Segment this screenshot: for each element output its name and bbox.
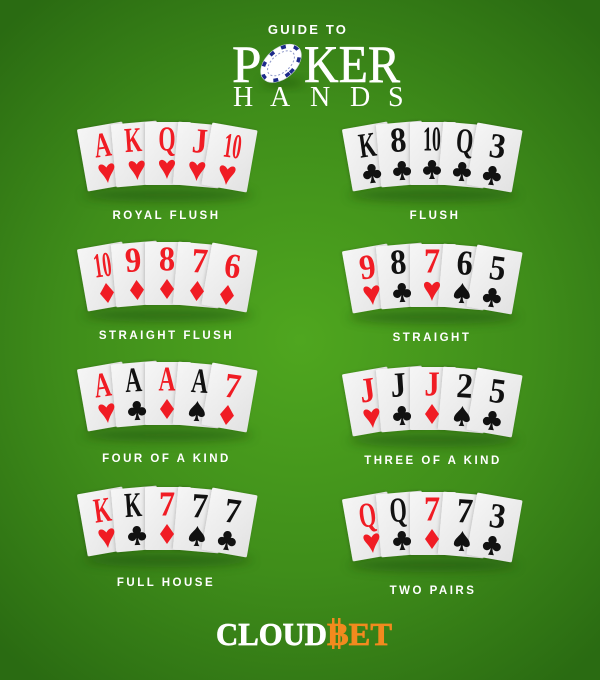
hand: flush bbox=[342, 120, 523, 202]
hand: straight flush bbox=[77, 240, 258, 322]
hand: straight flush: 9 bbox=[124, 241, 143, 280]
hand: full house: 7 bbox=[190, 487, 209, 526]
hand: two pairs: 7 bbox=[424, 490, 440, 529]
hand: full house: K bbox=[123, 486, 143, 525]
logo: cloudbet bbox=[216, 616, 392, 652]
hand: four of a kind: A bbox=[190, 361, 210, 401]
label: straight: STRAIGHT bbox=[393, 332, 471, 344]
label: straight flush: STRAIGHT FLUSH bbox=[99, 330, 234, 342]
hand: full house: 7 bbox=[222, 492, 243, 532]
hand: flush: Q bbox=[455, 122, 475, 161]
hand: royal flush bbox=[77, 121, 258, 202]
hand: four of a kind: A bbox=[123, 360, 143, 400]
title bbox=[232, 22, 404, 113]
hand: flush: 3 bbox=[487, 127, 508, 167]
hand: three of a kind: J bbox=[357, 370, 378, 411]
hand: two pairs: 3 bbox=[487, 497, 508, 537]
hand: two pairs: 7 bbox=[455, 492, 474, 531]
hand: three of a kind: 5 bbox=[487, 372, 508, 412]
icon: poker chip bbox=[253, 37, 309, 90]
label: full house: FULL HOUSE bbox=[117, 577, 215, 589]
hand: two pairs: Q bbox=[388, 491, 408, 530]
label: four of a kind: FOUR OF A KIND bbox=[102, 453, 231, 465]
hand: straight: 6 bbox=[455, 244, 474, 283]
hand: straight: 5 bbox=[487, 249, 508, 289]
heading: poker: P bbox=[232, 36, 261, 94]
hand: straight flush: 10 bbox=[91, 245, 114, 286]
hand: royal flush: Q bbox=[158, 121, 176, 159]
hand: full house: K bbox=[91, 491, 114, 531]
heading: poker: KER bbox=[304, 36, 401, 94]
logo: cloudbet: BET bbox=[327, 616, 392, 652]
hand: straight: 8 bbox=[389, 243, 408, 282]
hand: four of a kind: A bbox=[91, 365, 114, 406]
hand: full house: 7 bbox=[159, 485, 175, 524]
hand: straight flush: 8 bbox=[159, 240, 175, 279]
heading: hands: HANDS bbox=[233, 82, 404, 113]
label: royal flush: ROYAL FLUSH bbox=[112, 210, 221, 222]
hand: two pairs bbox=[342, 490, 523, 572]
hand: flush: 8 bbox=[389, 121, 408, 160]
hand: straight: 7 bbox=[424, 242, 440, 281]
hand: royal flush: 10 bbox=[221, 126, 244, 167]
hand: straight bbox=[342, 242, 523, 324]
hand: straight flush: 7 bbox=[190, 242, 209, 281]
hand: flush: K bbox=[356, 126, 379, 166]
hand: straight flush: 6 bbox=[222, 247, 243, 287]
hand: two pairs: Q bbox=[356, 496, 379, 536]
hand: four of a kind bbox=[77, 360, 258, 442]
hand: royal flush: A bbox=[91, 125, 114, 166]
hand: flush: 10 bbox=[423, 120, 441, 159]
heading: guide to: GUIDE TO bbox=[268, 22, 348, 37]
label: three of a kind: THREE OF A KIND bbox=[364, 455, 502, 467]
label: two pairs: TWO PAIRS bbox=[390, 585, 476, 597]
hand: four of a kind: A bbox=[159, 360, 176, 399]
hand: royal flush: K bbox=[123, 121, 143, 160]
hand: full house bbox=[77, 485, 258, 567]
hand: three of a kind bbox=[342, 365, 523, 447]
hand: three of a kind: 2 bbox=[455, 367, 474, 406]
logo: cloudbet: CLOUD bbox=[216, 616, 327, 652]
label: flush: FLUSH bbox=[410, 210, 460, 222]
hand: three of a kind: J bbox=[389, 365, 407, 405]
hand: royal flush: J bbox=[191, 121, 209, 161]
hand: four of a kind: 7 bbox=[222, 367, 243, 407]
hand: straight: 9 bbox=[357, 248, 378, 288]
hand: three of a kind: J bbox=[424, 365, 440, 404]
